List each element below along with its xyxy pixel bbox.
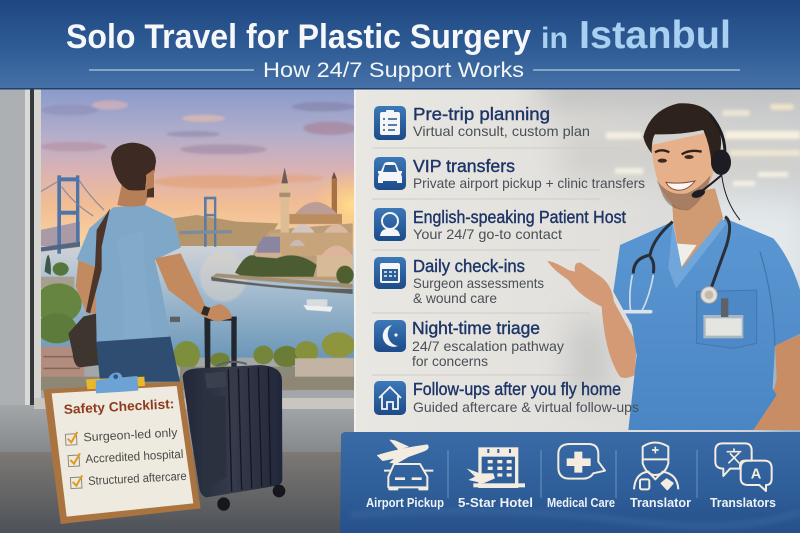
title accent: in: in	[541, 22, 568, 55]
step 5 description line 2: for concerns	[412, 353, 488, 369]
water	[40, 246, 355, 358]
near bridge	[57, 175, 79, 254]
subtitle: How 24/7 Support Works	[263, 59, 524, 82]
label: translator: Translator	[630, 495, 691, 510]
title: Solo Travel for Plastic Surgery	[66, 18, 531, 56]
icon: translation bubbles: A	[751, 467, 762, 483]
checklist heading: Safety Checklist:	[63, 396, 175, 417]
step 4 description line 2: & wound care	[413, 290, 497, 306]
label: airport pickup: Airport Pickup	[366, 495, 444, 510]
icon: host with headset	[374, 208, 406, 241]
checklist item: accredited hospital: Accredited hospital	[85, 447, 184, 466]
shoulder bag	[68, 313, 99, 367]
title accent: Istanbul: Istanbul	[579, 14, 731, 57]
bag strap	[86, 208, 110, 313]
step 3 description: Your 24/7 go-to contact	[413, 226, 562, 242]
step 6 heading: Follow-ups after you fly home	[413, 379, 621, 399]
step 6 description: Guided aftercare & virtual follow-ups	[413, 399, 639, 415]
step 2: VIP transfers	[374, 156, 645, 191]
clipboard paper	[52, 386, 193, 517]
step 5 heading: Night-time triage	[412, 318, 540, 338]
clipboard board	[43, 382, 201, 524]
traveller arm on suitcase handle	[155, 253, 232, 322]
step 5 description: 24/7 escalation pathway	[412, 338, 564, 354]
step 3: patient host	[374, 207, 626, 242]
traveller seen from behind	[68, 143, 181, 382]
step 4: daily check-ins	[374, 256, 544, 306]
step 6: follow-ups	[374, 379, 639, 415]
window wall and floor	[0, 89, 357, 533]
far-side bank and mosque	[235, 167, 354, 284]
step 3 heading: English-speaking Patient Host	[413, 207, 626, 227]
clipboard clip	[86, 373, 145, 393]
hair	[643, 103, 721, 165]
panel: support steps background	[356, 70, 800, 440]
step 2 description: Private airport pickup + clinic transfers	[413, 175, 645, 191]
left forearm and hand	[547, 261, 637, 378]
icon: house	[374, 381, 406, 415]
Istanbul window view	[41, 90, 354, 390]
label: medical care: Medical Care	[547, 495, 615, 510]
step 1: pre-trip planning	[374, 104, 590, 140]
suitcase	[183, 317, 285, 511]
icon: calendar	[374, 257, 406, 289]
stethoscope	[633, 217, 730, 287]
ferry	[303, 305, 333, 312]
quay	[212, 273, 353, 288]
neck	[672, 188, 723, 268]
step 1 heading: Pre-trip planning	[413, 104, 550, 124]
icon: doctor	[634, 442, 678, 489]
label: 5-star hotel: 5-Star Hotel	[458, 495, 533, 510]
icon: translation bubbles	[715, 443, 772, 491]
headset	[690, 115, 740, 220]
hills	[173, 215, 278, 247]
icon: calendar and plane	[467, 447, 525, 488]
right forearm	[752, 335, 800, 430]
icon: plane and car	[377, 440, 433, 489]
icon: car	[374, 157, 406, 190]
panel: safety checklist clipboard	[43, 373, 201, 524]
step 4 heading: Daily check-ins	[413, 256, 525, 276]
icon: clipboard checklist	[374, 106, 406, 140]
service icons	[377, 440, 772, 491]
t-shirt	[77, 204, 181, 342]
step 2 heading: VIP transfers	[413, 156, 515, 176]
neck	[117, 185, 148, 207]
icon: crescent moon	[374, 320, 406, 352]
step 4 description: Surgeon assessments	[413, 275, 544, 291]
jeans	[96, 335, 180, 382]
eyes and brows	[655, 150, 702, 163]
header banner	[0, 0, 800, 90]
distant bridge	[204, 197, 216, 247]
head	[111, 143, 156, 190]
smile	[666, 181, 695, 190]
bottom trees and houses	[173, 341, 200, 369]
support agent in scrubs	[547, 103, 800, 430]
panel: bottom services bar	[340, 432, 800, 533]
icon: medical speech bubble	[558, 444, 605, 479]
label: translators: Translators	[710, 495, 776, 510]
step 1 description: Virtual consult, custom plan	[413, 123, 590, 139]
left arm	[76, 260, 100, 313]
scrub top	[613, 218, 800, 430]
checklist item: structured aftercare: Structured aftercare	[88, 469, 187, 488]
step 5: night-time triage	[374, 318, 564, 369]
checklist item: surgeon-led: Surgeon-led only	[83, 425, 178, 444]
near left trees	[45, 255, 51, 275]
face	[652, 132, 714, 210]
undershirt	[674, 243, 697, 267]
